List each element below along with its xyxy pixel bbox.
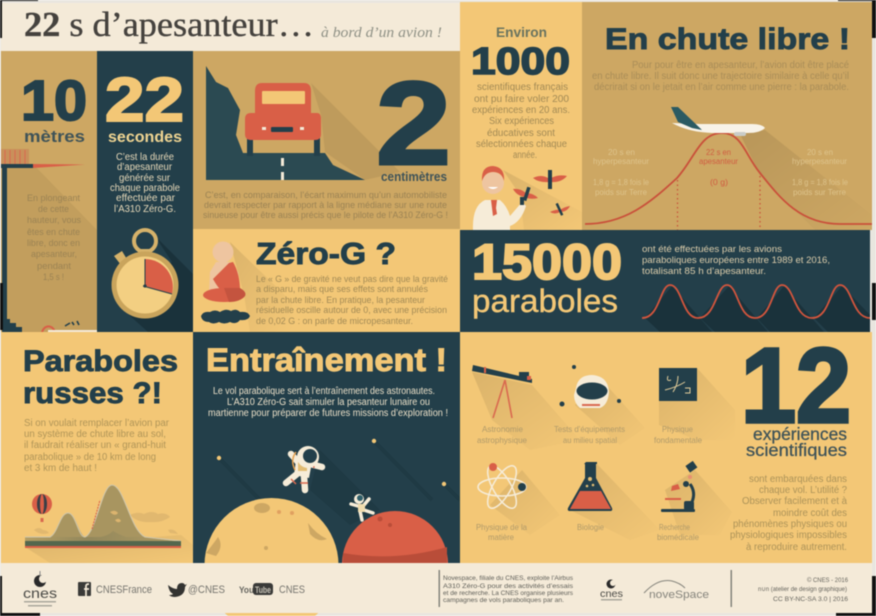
text: duration explanation: d’apesanteur: [117, 162, 173, 173]
subtitle: à bord d’un avion !: [321, 25, 442, 41]
illustration: moon: [204, 498, 338, 616]
label: paraboles: paraboles: [472, 283, 618, 319]
panel: 1000 scientists: [460, 2, 582, 230]
text: experiments usefulness: physiologiques impossibles: [730, 530, 847, 541]
panel: footer: [1, 563, 872, 613]
text: training explanation: Le vol parabolique sert à l’entraînement des astronautes.: [213, 386, 435, 397]
text: Novespace description: campagnes de vols paraboliques par an.: [443, 598, 564, 604]
social: Twitter: [168, 583, 225, 597]
text: diving explanation: [27, 193, 81, 283]
text: Zero-G explanation: de 0,02 G : on parle de micropesanteur.: [256, 316, 413, 327]
labels: hypergravity left: 1,8 g = 1,8 fois le: [593, 178, 650, 187]
text: Zero-G explanation: résiduelle oscille autour de 0, avec une précision: [256, 305, 447, 316]
text: rollercoaster: et 3 km de haut !: [24, 463, 97, 474]
panel: 22 secondes: [97, 51, 193, 332]
logo: CNES small: cnes: [600, 589, 623, 600]
heading: Paraboles russes: russes ?!: [23, 377, 162, 410]
text: experiments usefulness: Observer facilement et à: [742, 496, 847, 507]
panel: training: [193, 332, 460, 616]
text: experiments usefulness: chaque vol. L’utilité ?: [759, 485, 847, 496]
label: astronomy: [477, 424, 527, 445]
text: road comparison: [203, 190, 448, 221]
text: scientists: ont pu faire voler 200: [474, 94, 569, 105]
labels: hypergravity right: 1,8 g = 1,8 fois le: [792, 178, 849, 187]
number 15000: 15000: [472, 234, 622, 290]
panel: free fall: [582, 2, 872, 230]
panel: Russian parabolas: [1, 332, 193, 563]
text: free fall explanation: décrirait si on le jetait en l’air comme une pierre : la parabole.: [594, 82, 849, 93]
text: scientists: [472, 82, 570, 161]
icon: diving tower: [1, 149, 97, 332]
text: credits: CC BY-NC-SA 3.0 | 2016: [773, 596, 848, 603]
text: experiments usefulness: [730, 474, 847, 553]
text: flights total: totalisant 85 h d’apesanteur.: [642, 266, 766, 277]
text: scientists: sélectionnées chaque: [476, 139, 567, 150]
icon: flask: [568, 462, 660, 540]
social: YouTube: You: [239, 585, 254, 595]
labels: hypergravity right: [792, 148, 849, 197]
text: scientists: expériences en 20 ans.: [472, 105, 570, 116]
text: free fall explanation: [592, 60, 849, 93]
social: Facebook: CNESFrance: [96, 584, 152, 596]
logo: Novespace: [644, 580, 709, 601]
text: flights total: paraboliques européens entre 1989 et 2016,: [642, 255, 830, 266]
heading: Zero-G: Zéro-G ?: [256, 236, 396, 271]
unit: metres: mètres: [24, 128, 85, 146]
text: credits: © CNES - 2016: [807, 576, 848, 584]
icon: microscope: [661, 461, 732, 535]
text: duration explanation: l’A310 Zéro-G.: [114, 204, 176, 215]
icon: Airbus A310: [671, 107, 765, 136]
logo: CNES: [23, 571, 57, 606]
text: scientists: scientifiques français: [477, 82, 568, 93]
text: experiments usefulness: sont embarquées dans: [749, 474, 847, 485]
labels: hypergravity left: [593, 148, 650, 197]
text: rollercoaster: [24, 418, 170, 474]
label: experiences scientifiques: [746, 424, 847, 460]
icon: atom: [478, 462, 560, 535]
icon: blackboard: [659, 368, 735, 440]
label: equipment tests: Tests d’équipements: [554, 424, 625, 434]
text: diving explanation: êtes en chute: [27, 227, 80, 238]
social: Twitter: @CNES: [188, 584, 225, 596]
text: road comparison: sinueuse pour être aussi précis que le pilote de l’A310 Zéro-G !: [203, 210, 448, 221]
icon: helmet: [560, 365, 645, 445]
text: diving explanation: pendant: [37, 261, 71, 272]
labels: weightlessness centre: (0 g): [710, 178, 728, 187]
text: training explanation: L’A310 Zéro-G sait simuler la pesanteur lunaire ou: [227, 397, 430, 408]
text: experiments usefulness: à reproduire autrement.: [746, 542, 847, 553]
text: rollercoaster: Si on voulait remplacer l’avion par: [24, 418, 170, 429]
unit: centimetres: centimètres: [381, 170, 447, 184]
panel: 2 centimetres: [193, 51, 460, 229]
logo: Novespace: noveSpace: [649, 589, 709, 601]
panel: title band: [1, 3, 460, 51]
labels: hypergravity left: 20 s en: [608, 148, 635, 157]
text: Zero-G explanation: Le « G » de gravité ne veut pas dire que la gravité: [256, 274, 448, 285]
label: fundamental physics: Physique: [662, 424, 693, 434]
labels: hypergravity right: 20 s en: [807, 148, 833, 157]
text: diving explanation: En plongeant: [27, 193, 80, 204]
labels: hypergravity right: hyperpesanteur: [792, 157, 847, 166]
text: diving explanation: 1,5 s !: [43, 272, 64, 283]
number 1000: 1000: [471, 41, 570, 83]
icon: stopwatch: [112, 230, 193, 332]
label: matter physics: matière: [488, 532, 514, 542]
labels: hypergravity left: hyperpesanteur: [593, 157, 649, 166]
labels: weightlessness centre: apesanteur: [699, 157, 738, 166]
icon: telescope: [472, 365, 580, 450]
label: biomedical: biomédicale: [657, 532, 699, 542]
text: training explanation: martienne pour préparer de futures missions d’exploration !: [208, 408, 448, 419]
text: scientists: année.: [513, 150, 537, 161]
text: duration explanation: chaque parabole: [110, 183, 180, 194]
heading: En chute libre: En chute libre !: [605, 23, 850, 56]
heading: Entrainement: Entraînement !: [206, 342, 447, 378]
stars: [217, 439, 460, 500]
label: equipment tests: au milieu spatial: [563, 435, 617, 445]
panel: Zero-G: [193, 229, 460, 332]
text: free fall explanation: Pour pour être en apesanteur, l’avion doit être placé: [632, 60, 849, 71]
label: fundamental physics: [654, 424, 702, 445]
heading: Paraboles russes: Paraboles: [23, 345, 178, 378]
illustration: road, cliff and car: [206, 66, 400, 180]
text: duration explanation: effectuée par: [116, 193, 176, 204]
label: astronomy: astrophysique: [477, 435, 527, 445]
chart: repeated parabolas: [642, 285, 870, 332]
text: scientists: Six expériences: [489, 116, 554, 127]
text: diving explanation: hauteur, vous: [27, 215, 81, 226]
text: Zero-G explanation: [256, 274, 448, 327]
logo: CNES: cnes: [23, 585, 57, 601]
text: Novespace description: et de recherche. La CNES organise plusieurs: [443, 591, 573, 597]
text: Novespace description: A310 Zéro-G pour des activités d’essais: [443, 584, 573, 590]
label: matter physics: Physique de la: [476, 522, 527, 532]
text: scientists: éducatives sont: [487, 128, 555, 139]
label: experiences scientifiques: expériences: [753, 424, 847, 444]
illustration: Mars: [341, 510, 449, 564]
text: road comparison: devrait respecter par rapport à la ligne médiane sur une route: [204, 200, 447, 211]
text: credits: [758, 576, 848, 603]
social: YouTube: Tube: [255, 585, 271, 595]
labels: weightlessness centre: 22 s en: [706, 148, 731, 157]
label: astronomy: Astronomie: [482, 424, 523, 434]
labels: hypergravity left: poids sur Terre: [595, 188, 648, 197]
social: Facebook: [78, 582, 152, 596]
unit: secondes: secondes: [108, 129, 182, 146]
label: experiences scientifiques: scientifiques: [746, 440, 847, 460]
text: Zero-G explanation: par la chute libre. En pratique, la pesanteur: [256, 295, 425, 306]
illustration: large astronaut: [286, 446, 380, 525]
number 22: 22: [105, 66, 184, 135]
text: duration explanation: [110, 152, 180, 215]
label: fundamental physics: fondamentale: [654, 435, 702, 445]
text: rollercoaster: parabolique » de 10 km de long: [24, 452, 156, 463]
number 2: 2: [376, 58, 451, 190]
label: equipment tests: [554, 424, 625, 445]
chart: parabola trajectory: [585, 130, 872, 230]
number 10: 10: [21, 69, 87, 133]
label: biology: Biologie: [577, 522, 604, 532]
label: Environ: Environ: [496, 24, 547, 40]
text: rollercoaster: il faudrait réaliser un « grand-huit: [24, 440, 166, 451]
label: matter physics: [476, 522, 527, 542]
text: duration explanation: C’est la durée: [116, 152, 174, 163]
social: YouTube: [239, 583, 305, 596]
label: biomedical: [657, 522, 699, 542]
text: diving explanation: apesanteur,: [31, 249, 77, 260]
text: credits: n∪n (atelier de design graphique): [758, 586, 847, 593]
labels: hypergravity right: poids sur Terre: [793, 188, 847, 197]
text: experiments usefulness: moindre coût des: [773, 508, 847, 519]
heading: Paraboles russes: [23, 345, 178, 410]
text: training explanation: [208, 386, 448, 419]
text: Novespace description: [443, 576, 573, 604]
social: YouTube: CNES: [279, 584, 305, 596]
icon: meditating monk: [201, 242, 292, 332]
text: rollercoaster: un système de chute libre au sol,: [24, 429, 166, 440]
illustration: small astronaut: [351, 494, 373, 520]
text: experiments usefulness: phénomènes physiques ou: [733, 519, 847, 530]
illustration: scientist with paper birds: [473, 166, 582, 230]
illustration: mountains and balloon: [25, 485, 193, 563]
text: duration explanation: générée sur: [119, 173, 171, 184]
title: 22 s d’apesanteur…: [24, 5, 314, 44]
panel: 15000 parabolas: [460, 230, 870, 332]
text: Zero-G explanation: a disparu, mais que ses effets sont annulés: [256, 284, 428, 295]
panel: experiments: [460, 327, 872, 563]
text: flights total: ont été effectuées par les avions: [642, 244, 782, 255]
label: biomedical: Recherche: [659, 522, 690, 532]
text: flights total: [642, 244, 830, 277]
text: free fall explanation: en chute libre. Il suit donc une trajectoire similaire à celle qu’il: [592, 71, 849, 82]
text: diving explanation: libre, donc en: [27, 238, 80, 249]
text: Novespace description: Novespace, filiale du CNES, exploite l’Airbus: [443, 576, 573, 582]
panel: 10 metres: [1, 51, 97, 332]
text: road comparison: C’est, en comparaison, l’écart maximum qu’un automobiliste: [205, 190, 447, 201]
number 12: 12: [741, 327, 851, 445]
labels: weightlessness centre: [699, 148, 738, 187]
logo: CNES small: [600, 580, 623, 600]
text: diving explanation: de cette: [38, 204, 69, 215]
